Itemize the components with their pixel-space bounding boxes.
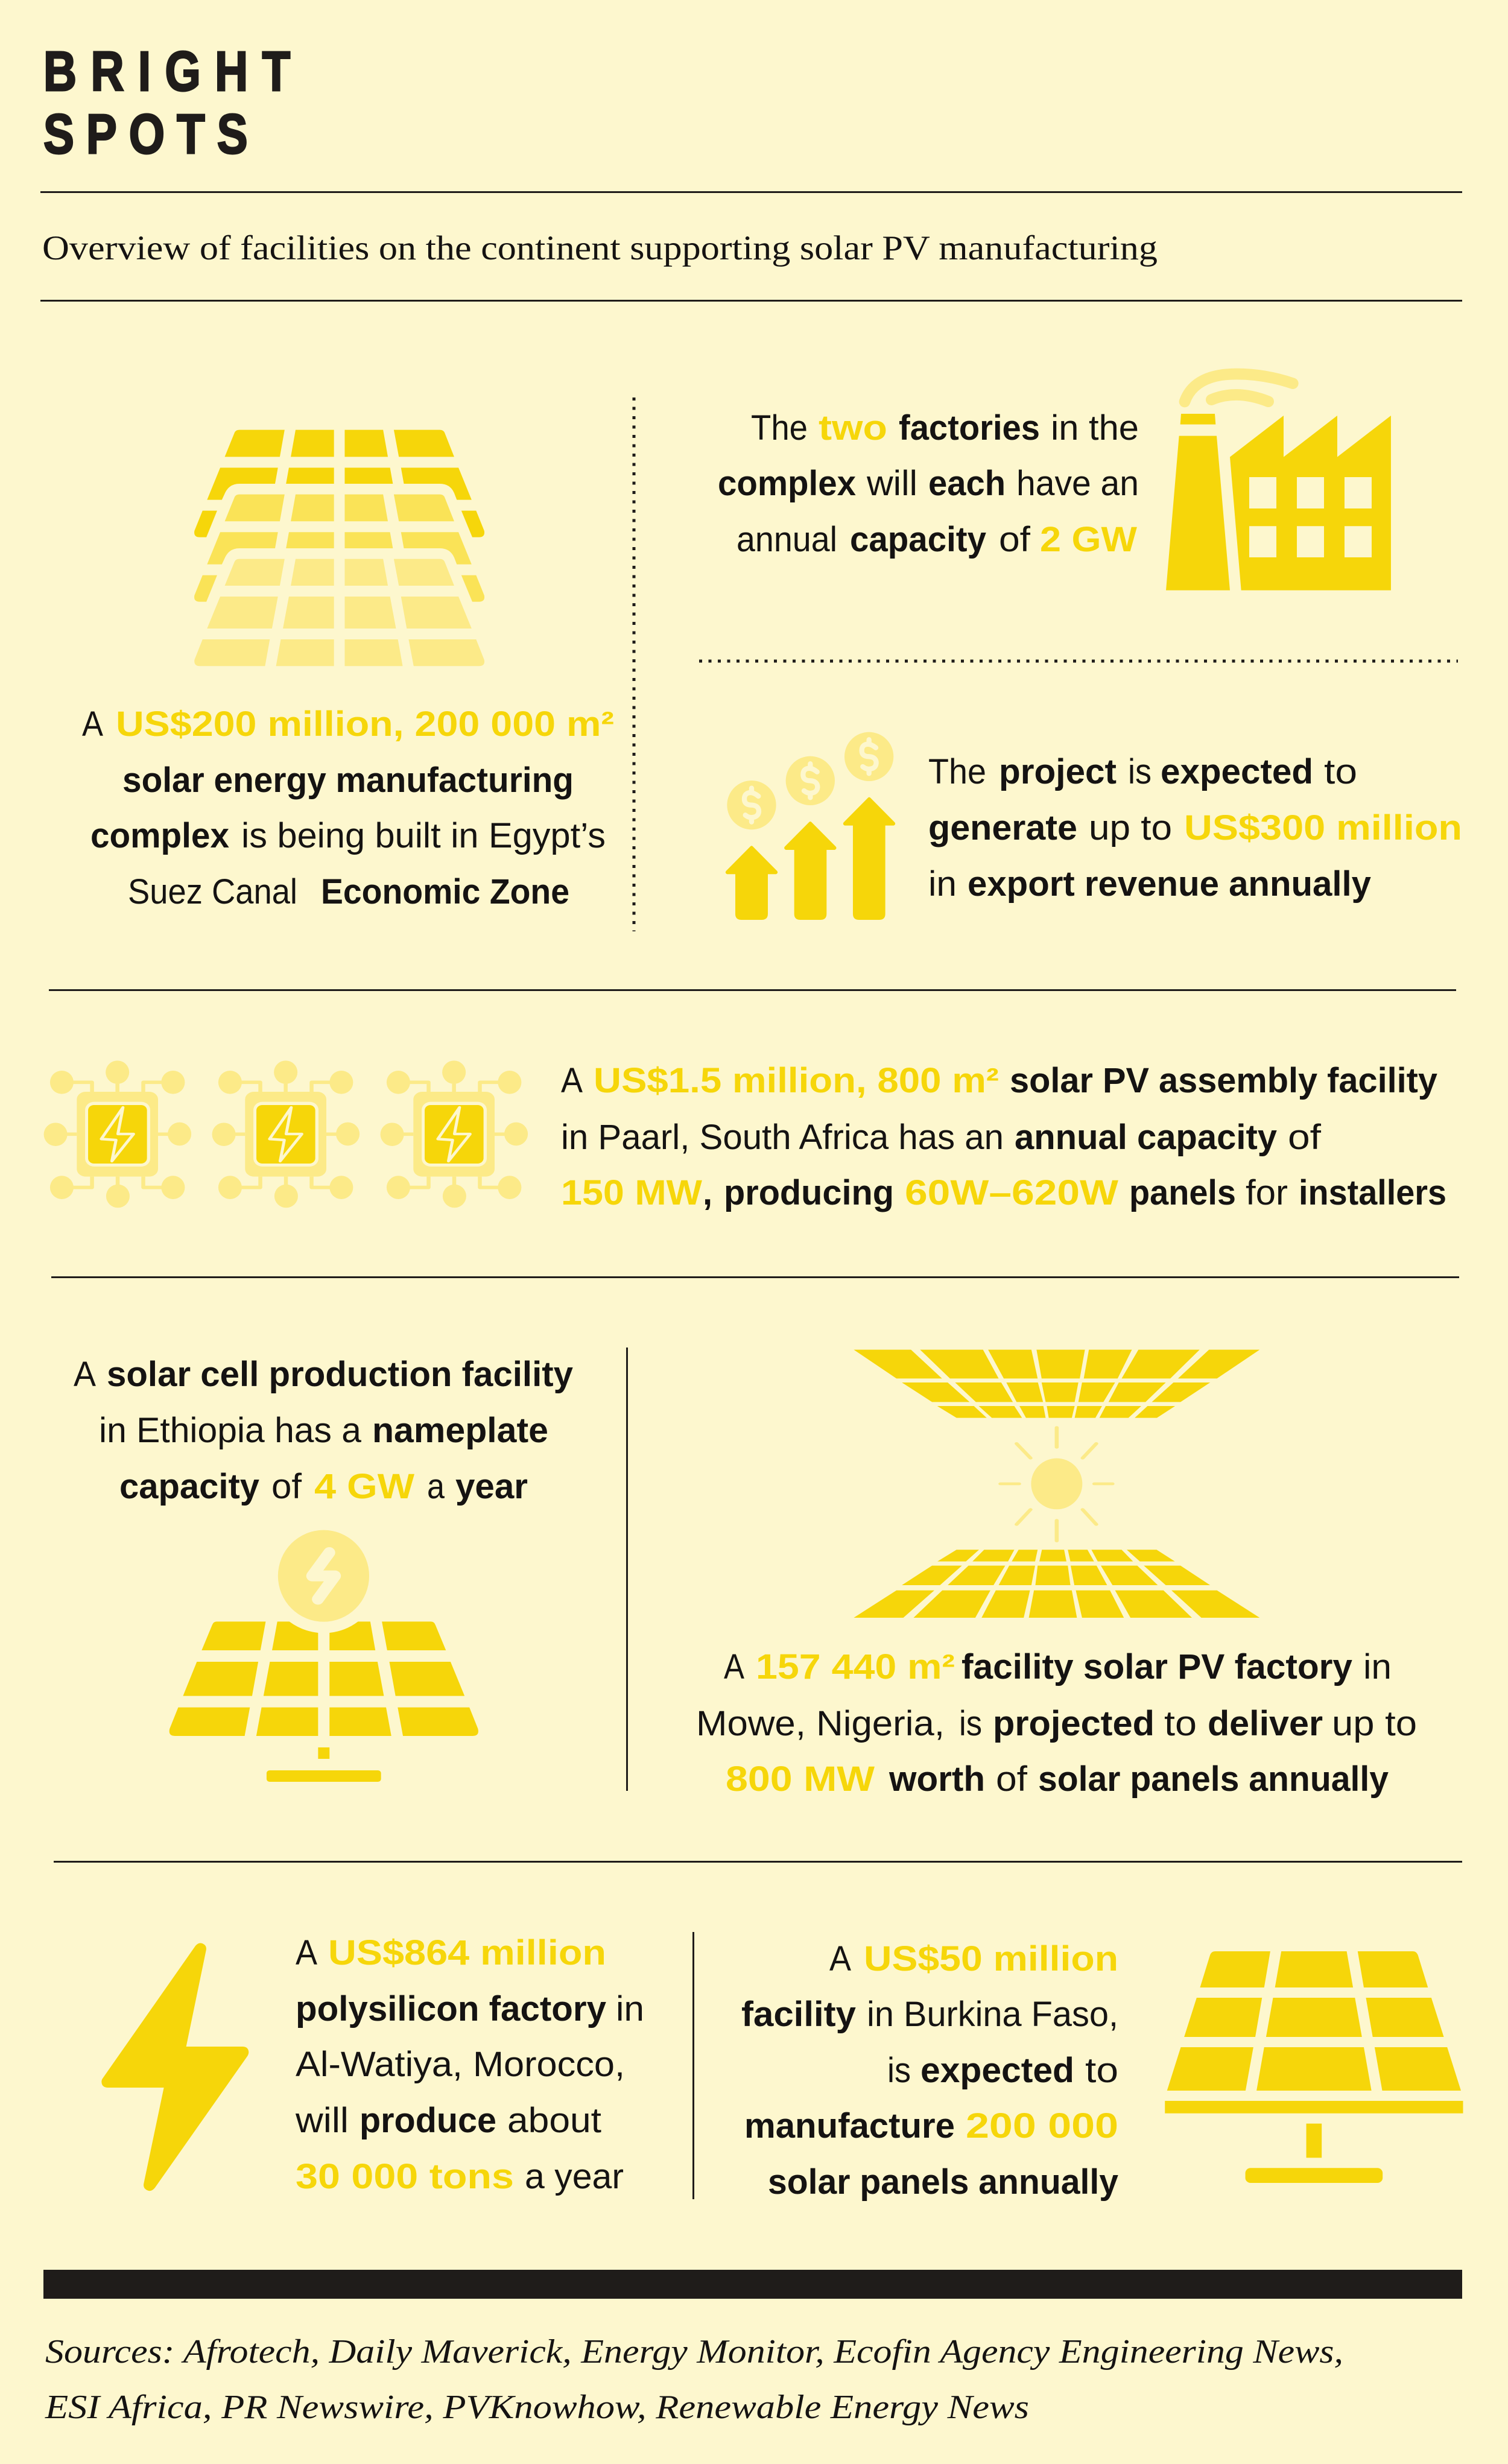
text: Ethiopia facility xyxy=(74,1355,573,1506)
text: Nigeria factory: worth xyxy=(889,1759,985,1799)
subtitle: Overview of facilities on the continent supporting solar PV manufacturing xyxy=(42,229,1158,267)
text: Ethiopia facility: a xyxy=(427,1467,445,1506)
text: two factories: of xyxy=(999,520,1031,559)
text: Burkina Faso facility: 200 000 xyxy=(966,2106,1118,2146)
text: South Africa facility: solar PV assembly facility xyxy=(1010,1061,1437,1100)
text: Egypt complex: A xyxy=(82,705,103,744)
panel: South Africa assembly facility xyxy=(44,1060,1446,1212)
text: Morocco factory: polysilicon factory xyxy=(296,1989,606,2029)
panel: Nigeria factory xyxy=(696,1350,1417,1799)
text: Egypt complex: is being built in Egypt’s xyxy=(241,816,606,855)
text: South Africa facility: US$1.5 million, 800 m² xyxy=(594,1061,999,1100)
text: Burkina Faso facility: facility xyxy=(741,1995,856,2034)
text: two factories: 2 GW xyxy=(1040,520,1137,559)
text: South Africa facility: annual capacity xyxy=(1015,1118,1277,1157)
text: export revenue: export revenue annually xyxy=(968,864,1371,904)
sources: Sources: Afrotech, Daily Maverick, Energy Monitor, Ecofin Agency Engineering News, xyxy=(45,2333,1343,2371)
text: Morocco factory: Al-Watiya, Morocco, xyxy=(296,2045,625,2084)
text: export revenue: to xyxy=(1324,752,1357,791)
text: export revenue: US$300 million xyxy=(1184,808,1462,847)
text: Ethiopia facility: of xyxy=(271,1467,302,1506)
text: South Africa facility: of xyxy=(1288,1118,1322,1157)
text: two factories: each xyxy=(928,464,1006,503)
panel: Ethiopia facility xyxy=(74,1355,573,1782)
text: Egypt complex: Suez Canal xyxy=(128,872,297,911)
text: export revenue: expected xyxy=(1161,752,1313,791)
text: Egypt complex: US$200 million, 200 000 m² xyxy=(116,705,614,744)
text: Egypt complex: solar energy manufacturing xyxy=(122,761,574,800)
text: Morocco factory: produce xyxy=(360,2101,496,2140)
text: Burkina Faso facility: to xyxy=(1085,2051,1118,2090)
icon: rising arrows and coins xyxy=(726,732,895,920)
footer bar xyxy=(43,2270,1462,2299)
text: South Africa facility: panels xyxy=(1129,1173,1236,1212)
text: Nigeria factory: 800 MW xyxy=(726,1759,875,1799)
title xyxy=(43,40,290,166)
text: Morocco factory: A xyxy=(296,1933,317,1972)
text: Morocco factory: will xyxy=(295,2101,349,2140)
text: Nigeria factory: A xyxy=(724,1647,744,1686)
text: Egypt complex: complex xyxy=(90,816,229,855)
text: Morocco factory xyxy=(295,1933,644,2196)
text: South Africa facility: producing xyxy=(724,1173,894,1212)
panel: Morocco factory xyxy=(101,1933,644,2196)
text: South Africa facility: A xyxy=(561,1061,583,1100)
text: Ethiopia facility: A xyxy=(74,1355,96,1394)
text: Morocco factory: US$864 million xyxy=(328,1933,606,1972)
text: Burkina Faso facility xyxy=(741,1939,1118,2202)
text: Burkina Faso facility: US$50 million xyxy=(864,1939,1118,1978)
title: BRIGHT xyxy=(43,40,290,103)
text: Morocco factory: in xyxy=(616,1989,644,2029)
sources: ESI Africa, PR Newswire, PVKnowhow, Renewable Energy News xyxy=(45,2389,1029,2426)
text: export revenue: project xyxy=(999,752,1117,791)
text: Nigeria factory: facility solar PV factory xyxy=(962,1647,1352,1686)
panel: Egypt complex xyxy=(82,430,614,911)
text: Ethiopia facility: 4 GW xyxy=(314,1467,414,1506)
text: South Africa facility: for xyxy=(1246,1173,1288,1212)
panel: Burkina Faso facility xyxy=(741,1939,1463,2202)
text: export revenue: The xyxy=(928,752,986,791)
text: two factories: The xyxy=(751,408,808,448)
icon: stacked solar panels xyxy=(194,430,484,666)
panel: two factories xyxy=(718,374,1391,591)
text: export revenue: generate xyxy=(928,808,1077,847)
text: two factories: factories xyxy=(899,408,1040,448)
text: Ethiopia facility: in Ethiopia has a xyxy=(99,1411,362,1450)
text: Morocco factory: about xyxy=(507,2101,601,2140)
text: export revenue xyxy=(928,752,1462,904)
text: export revenue: up to xyxy=(1089,808,1172,847)
text: Egypt complex xyxy=(82,705,614,911)
text: Nigeria factory: up to xyxy=(1332,1704,1417,1743)
icon: three circuit chips xyxy=(44,1060,528,1208)
text: South Africa facility xyxy=(561,1061,1446,1212)
text: South Africa facility: 150 MW xyxy=(561,1173,702,1212)
text: South Africa facility: in Paarl, South Africa has an xyxy=(561,1118,1004,1157)
text: export revenue: in xyxy=(928,864,957,904)
text: Nigeria factory: to xyxy=(1164,1704,1197,1743)
text: two factories: have an xyxy=(1016,464,1139,503)
text: two factories: will xyxy=(866,464,917,503)
text: Egypt complex: Economic Zone xyxy=(321,872,569,911)
text: Burkina Faso facility: is xyxy=(887,2051,911,2090)
text: Nigeria factory: projected xyxy=(993,1704,1155,1743)
text: South Africa facility: 60W–620W xyxy=(905,1173,1118,1212)
text: Nigeria factory: in xyxy=(1363,1647,1392,1686)
text: Nigeria factory: 157 440 m² xyxy=(756,1647,955,1686)
text: Nigeria factory: of xyxy=(996,1759,1028,1799)
text: Ethiopia facility: solar cell production facility xyxy=(107,1355,573,1394)
text: two factories: capacity xyxy=(850,520,986,559)
text: two factories: in the xyxy=(1051,408,1139,448)
sources xyxy=(45,2333,1343,2426)
text: Ethiopia facility: nameplate xyxy=(372,1411,548,1450)
text: two factories: complex xyxy=(718,464,856,503)
text: export revenue: is xyxy=(1128,752,1152,791)
text: Burkina Faso facility: manufacture xyxy=(744,2106,955,2146)
title: SPOTS xyxy=(43,103,248,166)
text: Nigeria factory: deliver xyxy=(1208,1704,1323,1743)
text: Burkina Faso facility: A xyxy=(829,1939,851,1978)
text: Ethiopia facility: year xyxy=(455,1467,528,1506)
text: two factories: annual xyxy=(737,520,837,559)
text: Burkina Faso facility: in Burkina Faso, xyxy=(867,1995,1118,2034)
text: Nigeria factory: Mowe, Nigeria, xyxy=(696,1704,945,1743)
text: South Africa facility: , xyxy=(703,1173,712,1212)
icon: lightning bolt xyxy=(101,1943,249,2191)
icon: sun between solar panels xyxy=(854,1350,1259,1618)
text: two factories: two xyxy=(819,408,887,448)
text: South Africa facility: installers xyxy=(1299,1173,1446,1212)
icon: solar panel on stand xyxy=(1165,1951,1463,2183)
text: two factories xyxy=(718,408,1139,559)
text: Burkina Faso facility: expected xyxy=(920,2051,1074,2090)
icon: factory xyxy=(1166,374,1391,591)
text: Morocco factory: 30 000 tons xyxy=(296,2157,514,2196)
text: Nigeria factory: is xyxy=(959,1704,982,1743)
text: Nigeria factory xyxy=(696,1647,1417,1799)
text: Morocco factory: a year xyxy=(525,2157,624,2196)
text: Nigeria factory: solar panels annually xyxy=(1038,1759,1389,1799)
icon: solar panel with power circle xyxy=(169,1530,478,1782)
text: Burkina Faso facility: solar panels annually xyxy=(768,2162,1118,2202)
panel: export revenue xyxy=(726,732,1462,920)
text: Ethiopia facility: capacity xyxy=(119,1467,259,1506)
